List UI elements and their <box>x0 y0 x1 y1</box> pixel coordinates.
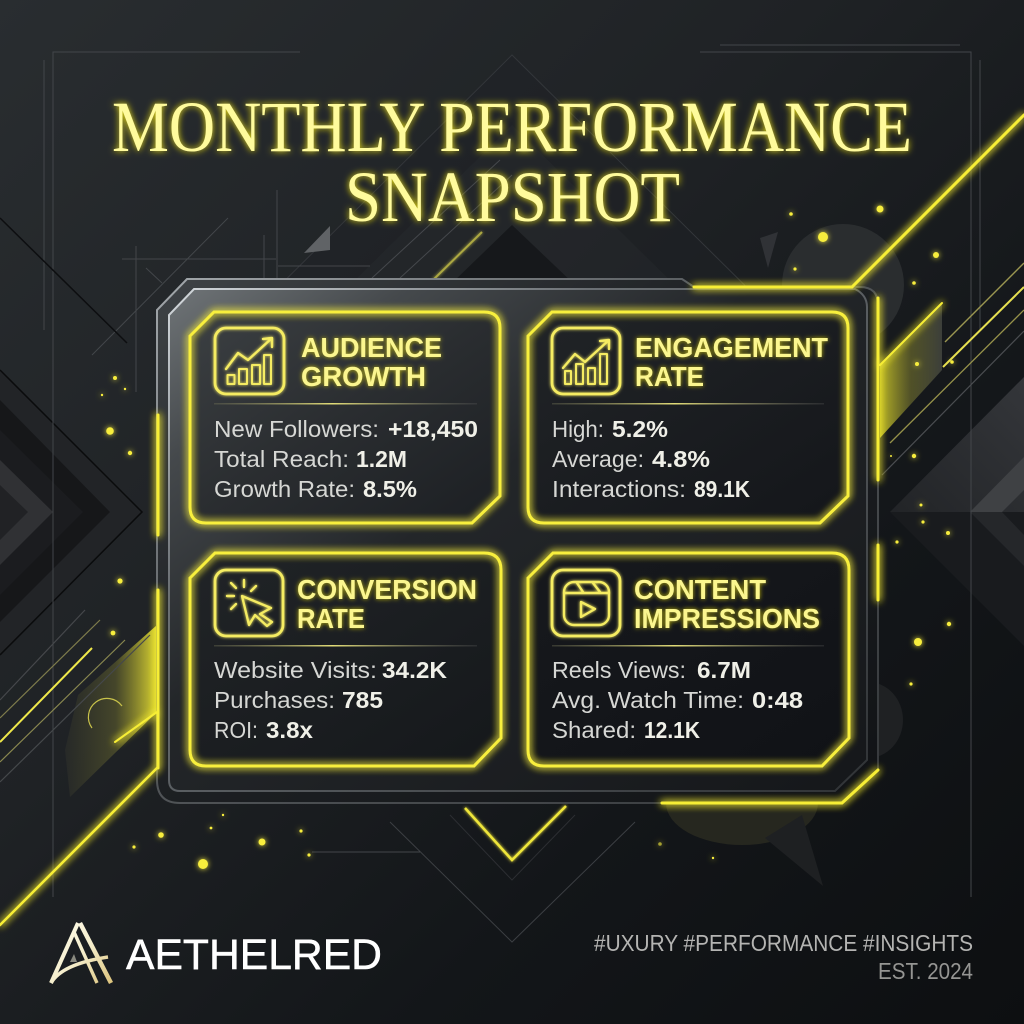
card frame <box>528 553 849 766</box>
background: soft blobs <box>666 224 904 886</box>
card frame <box>190 553 501 766</box>
left olive band <box>65 625 157 797</box>
background: dark diagonal <box>0 218 127 343</box>
left small circle outline <box>88 698 122 728</box>
stats <box>214 416 478 502</box>
stats: 8.5% <box>363 476 417 502</box>
brand name: AETHELRED <box>126 931 382 979</box>
background: small triangle right <box>760 232 778 268</box>
main glass panel <box>157 279 878 803</box>
heading: AUDIENCE <box>301 332 442 363</box>
icon: cursor click <box>215 570 283 636</box>
stats <box>552 416 750 502</box>
heading: CONVERSION <box>297 574 477 605</box>
stats: Avg. Watch Time: <box>552 687 744 713</box>
panel: conversion rate <box>190 553 501 766</box>
heading: CONTENT <box>634 574 766 605</box>
divider <box>214 403 477 404</box>
stats: Website Visits: <box>214 657 377 683</box>
card frame <box>528 312 848 523</box>
heading <box>635 332 828 392</box>
stats: Interactions: <box>552 476 686 502</box>
stats: 3.8x <box>266 717 313 743</box>
heading <box>297 574 477 634</box>
stats: Average: <box>552 446 644 472</box>
logo mark <box>51 923 111 983</box>
icon: engagement chart <box>552 328 620 394</box>
heading: IMPRESSIONS <box>634 603 820 634</box>
background: left chevrons <box>0 370 142 655</box>
divider <box>552 645 824 646</box>
background: top diamond shapes <box>235 55 790 600</box>
panel: audience growth <box>190 312 500 523</box>
title: SNAPSHOT <box>345 157 680 237</box>
icon: rising chart <box>215 328 284 394</box>
heading <box>301 332 442 392</box>
divider <box>552 403 824 404</box>
stats: Reels Views: <box>552 657 686 683</box>
stats: 1.2M <box>356 446 407 472</box>
stats: +18,450 <box>388 416 478 442</box>
particles <box>101 206 954 869</box>
stats: Total Reach: <box>214 446 349 472</box>
background: right chevrons <box>890 377 1024 646</box>
panel outer frame <box>157 279 878 803</box>
icon: video reel <box>552 570 620 636</box>
divider <box>214 645 477 646</box>
bottom neon chevron <box>465 806 566 860</box>
hashtags: #UXURY #PERFORMANCE #INSIGHTS <box>594 930 973 956</box>
heading: GROWTH <box>301 361 426 392</box>
stats: New Followers: <box>214 416 379 442</box>
stats <box>214 657 447 743</box>
stats: 6.7M <box>697 657 751 683</box>
neon accent lines <box>0 115 1024 925</box>
panel inner plate <box>169 289 867 791</box>
left stripes <box>0 610 150 782</box>
right stripes <box>882 263 1024 475</box>
panel: engagement rate <box>528 312 848 523</box>
stats: Purchases: <box>214 687 335 713</box>
faint accent line behind panel <box>433 232 482 280</box>
stats: 4.8% <box>652 446 710 472</box>
right olive band <box>880 303 942 438</box>
stats: 89.1K <box>694 476 750 502</box>
stats: 5.2% <box>612 416 668 442</box>
background: small triangle <box>304 226 330 253</box>
panel: content impressions <box>528 553 849 766</box>
stats: High: <box>552 416 604 442</box>
heading: ENGAGEMENT <box>635 332 828 363</box>
heading: RATE <box>635 361 704 392</box>
stats: 785 <box>342 687 383 713</box>
title <box>112 87 912 237</box>
stats: 12.1K <box>644 717 700 743</box>
stats <box>552 657 803 743</box>
card frame <box>190 312 500 523</box>
stats: 0:48 <box>752 687 803 713</box>
established year: EST. 2024 <box>878 958 973 984</box>
title: MONTHLY PERFORMANCE <box>112 87 912 167</box>
stats: ROI: <box>214 717 258 743</box>
heading <box>634 574 820 634</box>
heading: RATE <box>297 603 365 634</box>
stats: Shared: <box>552 717 636 743</box>
stats: 34.2K <box>382 657 447 683</box>
stats: Growth Rate: <box>214 476 355 502</box>
